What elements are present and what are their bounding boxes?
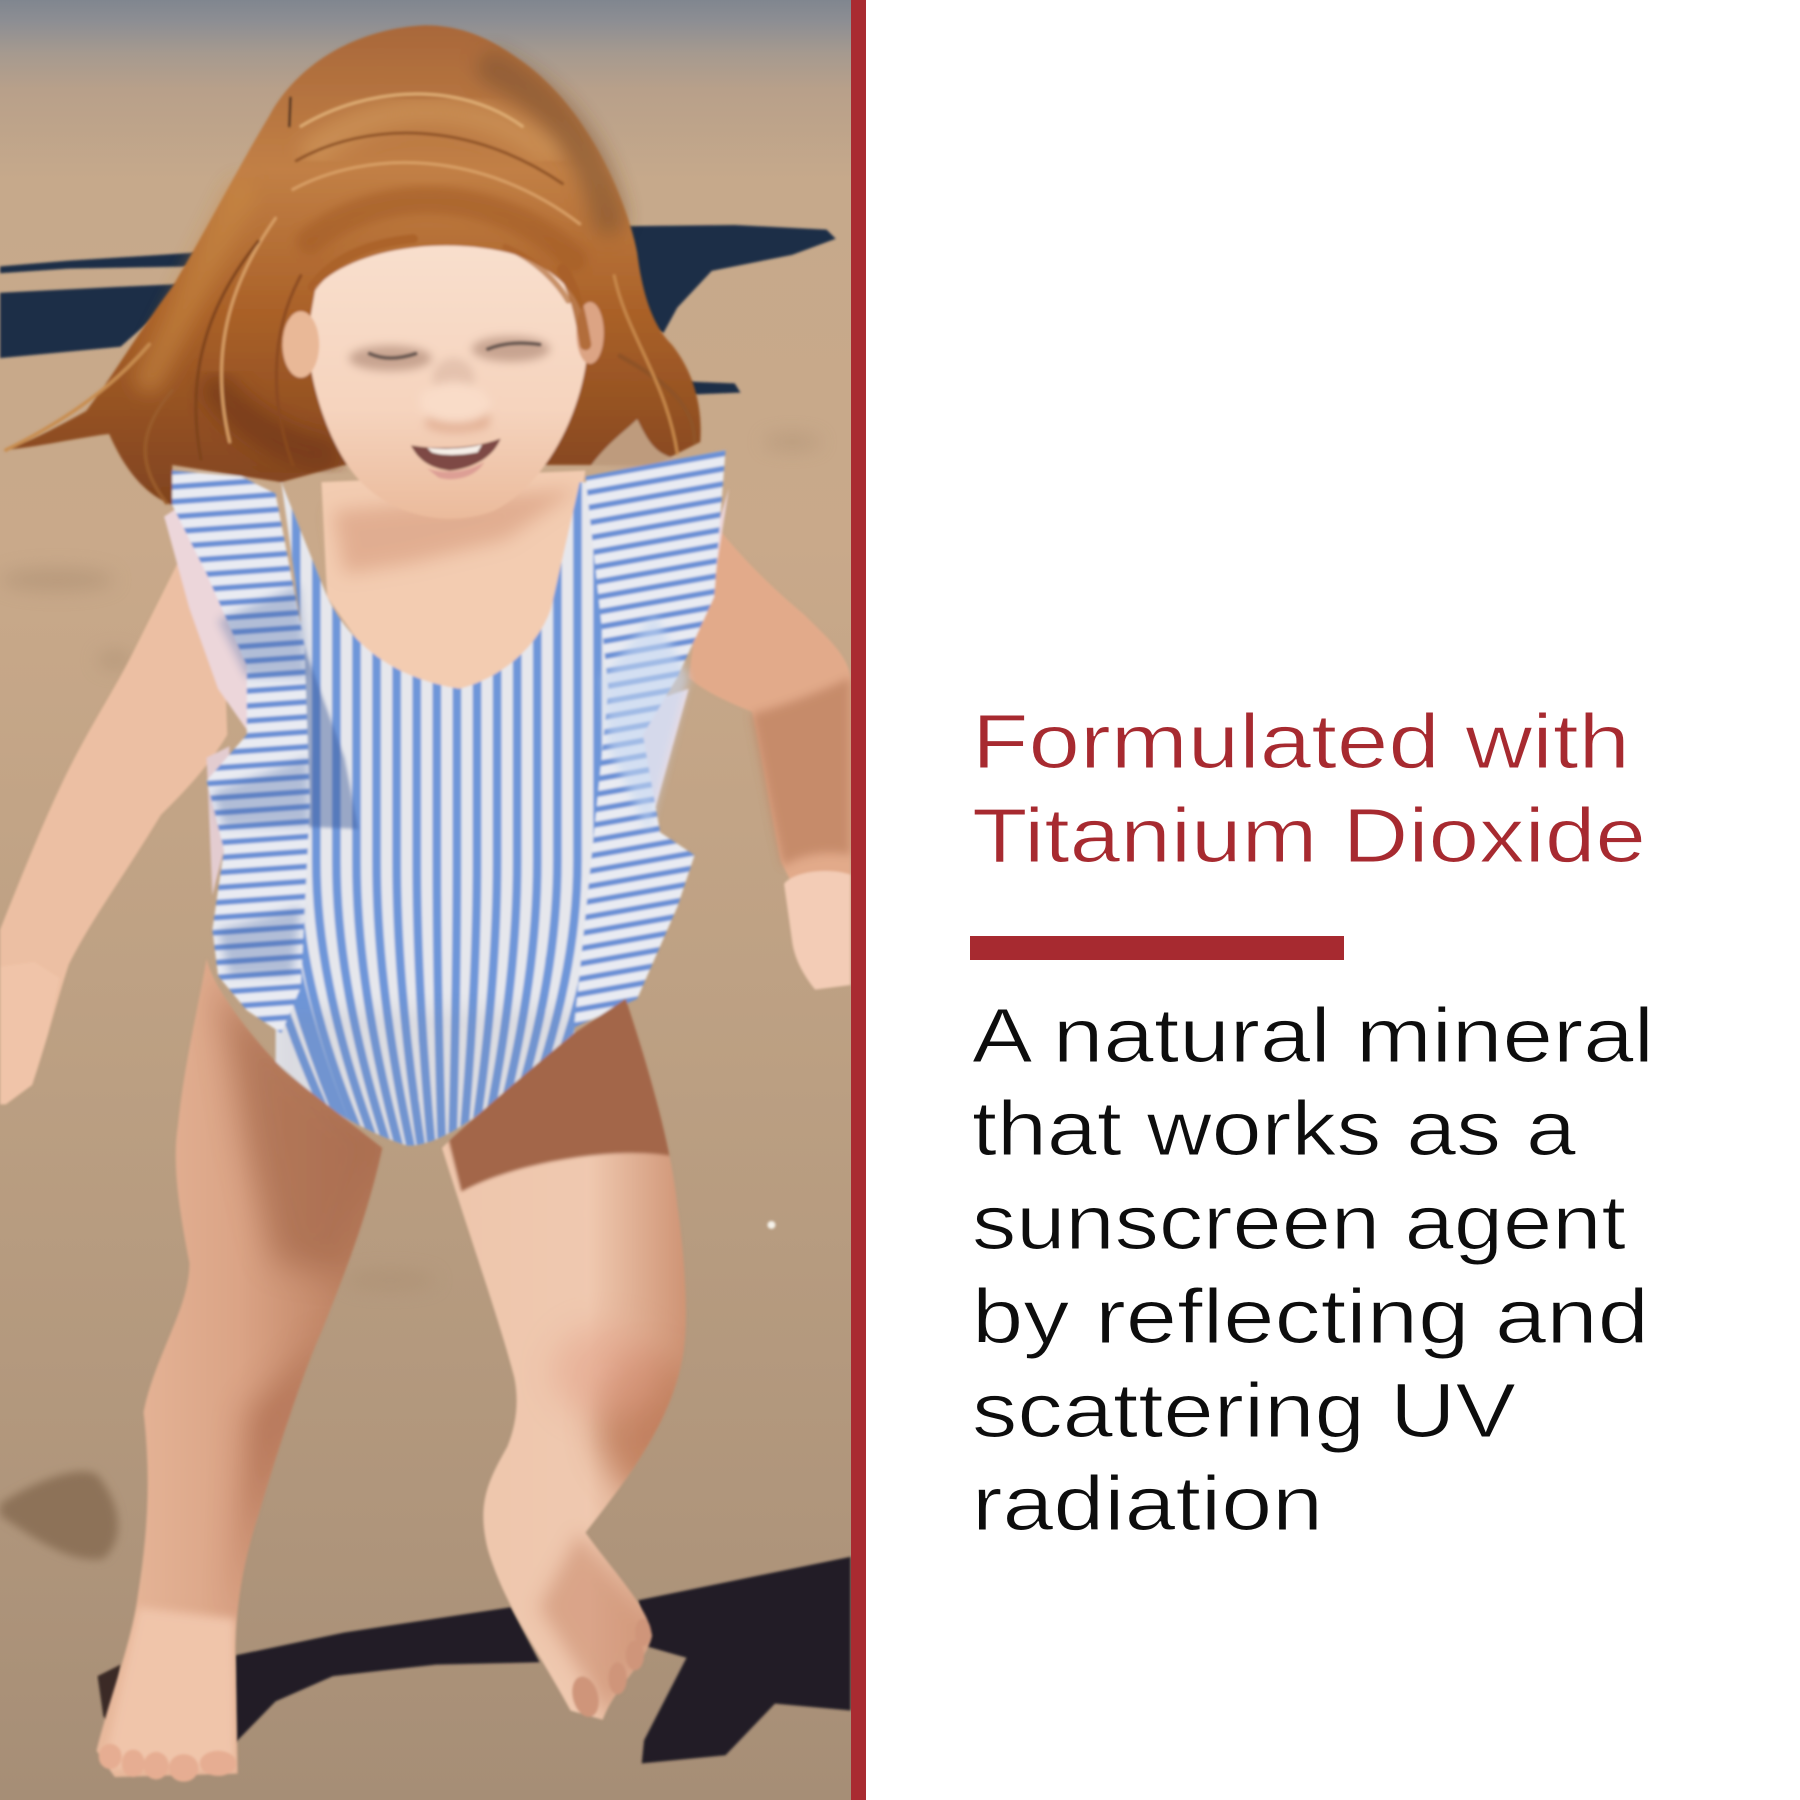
hair back bbox=[6, 25, 701, 505]
sand grain bbox=[767, 1221, 775, 1229]
panel: beach photo bbox=[0, 0, 852, 1800]
right arm shadow bbox=[752, 677, 851, 867]
pink ruffle backing left bbox=[164, 505, 250, 735]
child bbox=[0, 25, 851, 1782]
right ruffle bbox=[574, 450, 726, 1027]
right leg shading bbox=[436, 987, 700, 1716]
sand texture patches bbox=[14, 437, 802, 664]
torso shadow bbox=[301, 637, 358, 829]
eye shadows bbox=[349, 336, 550, 400]
right foot toes bbox=[568, 1619, 651, 1720]
mouth bbox=[411, 439, 501, 479]
left ruffle bbox=[172, 471, 310, 1033]
neck and chest bbox=[321, 471, 585, 689]
body text bbox=[972, 993, 1654, 1547]
right leg bbox=[442, 999, 686, 1720]
left leg shading bbox=[103, 987, 390, 1774]
left foot toes bbox=[99, 1744, 236, 1782]
body text: scattering UV bbox=[972, 1368, 1517, 1454]
hair strands bbox=[196, 94, 677, 465]
shadow: upper left bbox=[0, 253, 197, 358]
chin shadow bbox=[333, 488, 580, 574]
red rule bbox=[970, 936, 1344, 960]
body text: that works as a bbox=[972, 1086, 1576, 1172]
torso stripes bbox=[235, 471, 598, 1148]
right ruffle light fold bbox=[603, 614, 689, 832]
body text: sunscreen agent bbox=[972, 1180, 1626, 1266]
red vertical divider bbox=[851, 0, 866, 1800]
left ruffle folds bbox=[212, 585, 310, 976]
swimsuit torso bbox=[235, 471, 631, 1159]
left leg bbox=[96, 959, 382, 1777]
shadow: upper right bbox=[626, 225, 836, 395]
body text: by reflecting and bbox=[972, 1274, 1649, 1360]
sand pit bbox=[98, 1665, 121, 1728]
right hand bbox=[784, 871, 851, 990]
sand background bbox=[0, 0, 852, 1800]
ears bbox=[282, 311, 319, 378]
footprint in sand bbox=[0, 1472, 118, 1560]
heading: Titanium Dioxide bbox=[972, 793, 1646, 879]
right side sand gap in hair bbox=[591, 419, 677, 471]
heading bbox=[972, 699, 1646, 879]
left arm bbox=[0, 551, 227, 1104]
nose bbox=[419, 382, 491, 432]
body text: radiation bbox=[972, 1461, 1323, 1547]
pink ruffle backing right bbox=[689, 488, 729, 643]
eyes bbox=[370, 343, 540, 358]
shadow: lower bbox=[235, 1557, 851, 1763]
right arm bbox=[689, 517, 851, 890]
hair highlights and shadows bbox=[6, 69, 695, 503]
face bbox=[308, 246, 588, 519]
left hand bbox=[0, 962, 60, 1104]
fringe strands over forehead bbox=[312, 239, 585, 344]
heading: Formulated with bbox=[972, 699, 1630, 785]
body text: A natural mineral bbox=[972, 993, 1654, 1079]
